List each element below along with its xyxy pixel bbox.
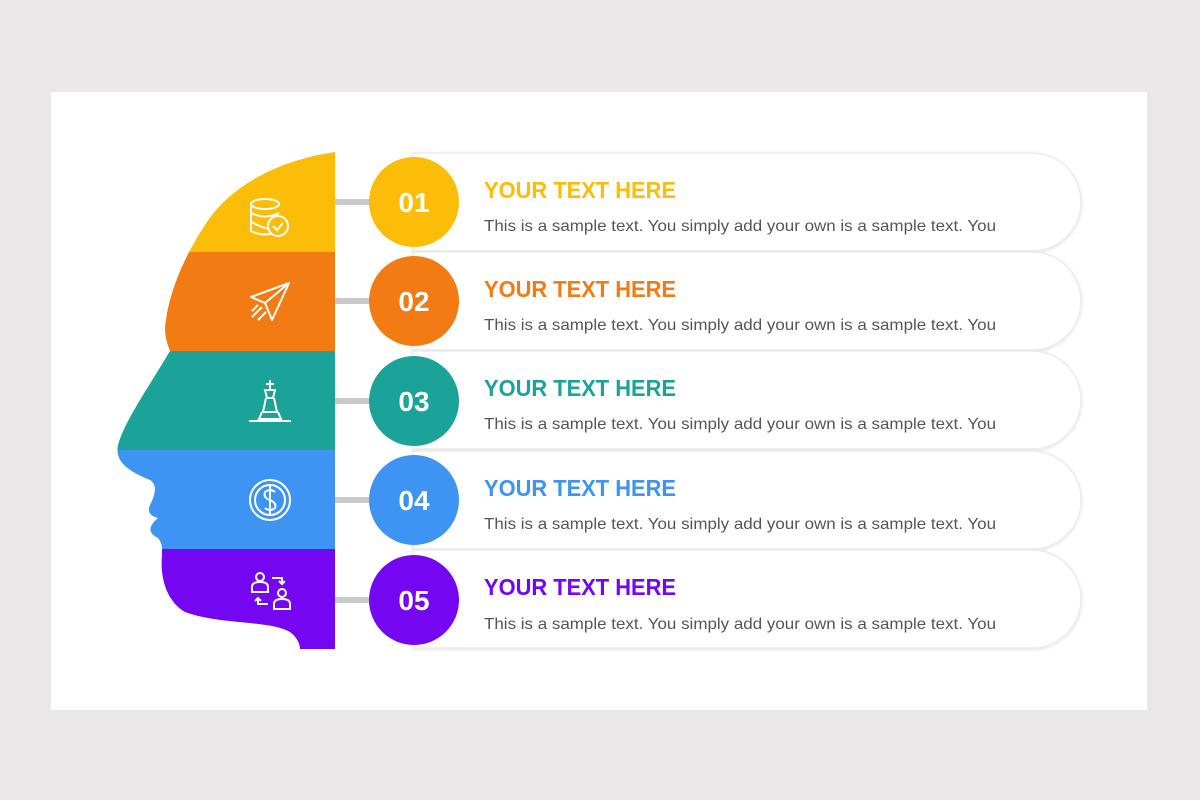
icon: database check bbox=[251, 199, 288, 236]
row 3: YOUR TEXT HERE bbox=[484, 375, 676, 401]
row 2: This is a sample text. You simply add your own is a sample text. You bbox=[484, 317, 996, 334]
white card panel bbox=[51, 92, 1147, 710]
row 2: 02 bbox=[398, 286, 430, 317]
row 1 bbox=[335, 153, 1081, 251]
row 5 bbox=[335, 550, 1081, 648]
row 3: 03 bbox=[398, 386, 430, 417]
row 2 bbox=[335, 252, 1081, 350]
row 3: This is a sample text. You simply add your own is a sample text. You bbox=[484, 416, 996, 433]
icon: dollar coin bbox=[250, 480, 290, 520]
row 5: 05 bbox=[398, 585, 430, 616]
row 5: YOUR TEXT HERE bbox=[484, 574, 676, 600]
row 2: YOUR TEXT HERE bbox=[484, 276, 676, 302]
row 1: YOUR TEXT HERE bbox=[484, 177, 676, 203]
row 4 bbox=[335, 451, 1081, 549]
icon: chess king bbox=[249, 380, 291, 421]
row 3 bbox=[335, 351, 1081, 449]
row 5: This is a sample text. You simply add your own is a sample text. You bbox=[484, 616, 996, 633]
icon: people exchange bbox=[252, 573, 290, 609]
icon: paper plane bbox=[251, 283, 289, 320]
row 4: YOUR TEXT HERE bbox=[484, 475, 676, 501]
row 1: 01 bbox=[398, 187, 430, 218]
row 4: 04 bbox=[398, 485, 430, 516]
row 4: This is a sample text. You simply add your own is a sample text. You bbox=[484, 516, 996, 533]
row 1: This is a sample text. You simply add your own is a sample text. You bbox=[484, 218, 996, 235]
head silhouette bbox=[100, 140, 335, 650]
